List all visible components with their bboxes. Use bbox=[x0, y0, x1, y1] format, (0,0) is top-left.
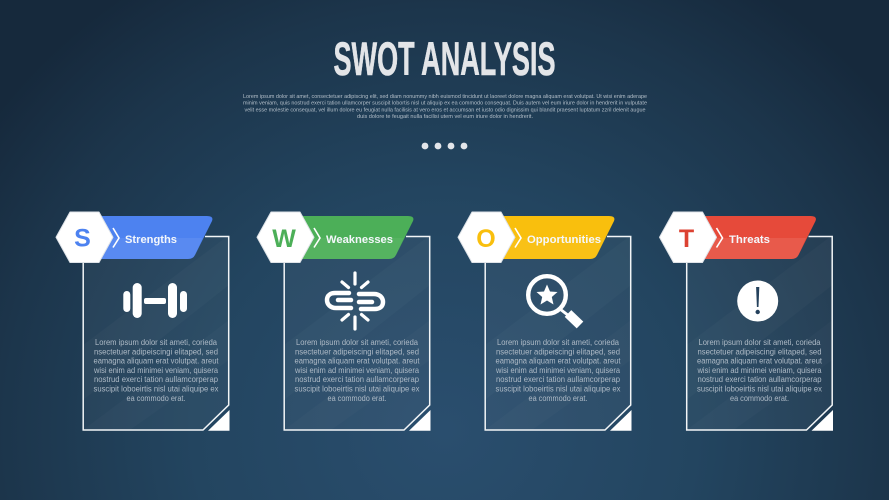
intro text block: duis dolore te feugait nulla facilisi utem vel eum iriure dolor in hendrerit. bbox=[357, 114, 533, 120]
text block: wisi enim ad minimei veniam, quisera bbox=[495, 366, 621, 375]
text block: eamagna aliquam erat volutpat. areut bbox=[496, 357, 621, 366]
text block bbox=[495, 338, 621, 403]
text block: suscipit loboeirtis nisl utai aliquipe ex bbox=[94, 384, 218, 394]
panel body bbox=[485, 235, 631, 430]
text block: ea commodo erat. bbox=[730, 394, 789, 403]
text block: eamagna aliquam erat volutpat. areut bbox=[697, 357, 823, 366]
corner triangle bbox=[610, 410, 632, 431]
panel outline bbox=[83, 236, 229, 430]
panel outline bbox=[284, 236, 430, 430]
intro text block: minim veniam, quis nostrud exerci tation ullamcorper suscipit lobortis nisl ut aliquip ex ea commodo consequat. Duis autem vel eum iriure dolor in hendrerit in vulputate bbox=[243, 101, 647, 107]
hexagon badge: O bbox=[476, 225, 496, 253]
banner bbox=[502, 216, 614, 259]
icon: alert circle bbox=[737, 280, 778, 322]
text block: nostrud exerci tation aullamcorperap bbox=[295, 375, 420, 384]
text block bbox=[93, 338, 219, 403]
text block: Lorem ipsum dolor sit ameti, corieda bbox=[698, 338, 821, 347]
text block: nsectetuer adipeiscingi elitaped, sed bbox=[295, 347, 419, 356]
chevron bbox=[314, 228, 320, 248]
corner triangle bbox=[409, 410, 430, 431]
text block: suscipit loboeirtis nisl utai aliquipe ex bbox=[496, 384, 620, 394]
panel body bbox=[83, 235, 229, 430]
hexagon badge: T bbox=[679, 225, 694, 253]
text block: wisi enim ad minimei veniam, quisera bbox=[697, 366, 822, 375]
chevron bbox=[113, 228, 119, 248]
text block: suscipit loboeirtis nisl utai aliquipe ex bbox=[697, 384, 822, 394]
panel: strengths bbox=[56, 212, 230, 431]
text block bbox=[294, 338, 420, 403]
heading: Threats: Threats bbox=[729, 234, 770, 246]
panel outline bbox=[485, 236, 631, 430]
text block: Lorem ipsum dolor sit ameti, corieda bbox=[497, 338, 620, 347]
text block: nsectetuer adipeiscingi elitaped, sed bbox=[698, 347, 822, 356]
panel: threats bbox=[660, 212, 833, 431]
banner bbox=[301, 216, 413, 259]
banner bbox=[100, 216, 212, 259]
panel body bbox=[284, 235, 430, 430]
text block: eamagna aliquam erat volutpat. areut bbox=[94, 357, 219, 366]
text block: suscipit loboeirtis nisl utai aliquipe ex bbox=[294, 384, 420, 394]
icon: magnifier with star bbox=[528, 276, 580, 325]
text block bbox=[697, 338, 823, 403]
heading: Opportunities: Opportunities bbox=[527, 234, 601, 246]
heading: Weaknesses: Weaknesses bbox=[326, 234, 393, 246]
icon: broken chain bbox=[327, 273, 383, 329]
text block: ea commodo erat. bbox=[126, 394, 186, 403]
text block: wisi enim ad minimei veniam, quisera bbox=[294, 366, 420, 375]
panel: opportunities bbox=[458, 212, 632, 431]
panel outline bbox=[687, 236, 832, 430]
banner bbox=[704, 216, 816, 259]
panel body bbox=[686, 235, 832, 430]
icon: dumbbell bbox=[123, 283, 187, 318]
intro text block: Lorem ipsum dolor sit amet, consectetuer adipiscing elit, sed diam nonummy nibh euismod tincidunt ut laoreet dolore magna aliquam erat volutpat. Ut wisi enim aderape bbox=[243, 94, 647, 100]
text block: ea commodo erat. bbox=[528, 394, 588, 403]
text block: nostrud exerci tation aullamcorperap bbox=[698, 375, 822, 384]
text block: nostrud exerci tation aullamcorperap bbox=[496, 375, 621, 384]
title: SWOT ANALYSIS bbox=[334, 32, 556, 85]
text block: nsectetuer adipeiscingi elitaped, sed bbox=[94, 347, 218, 356]
pagination dots bbox=[422, 143, 467, 149]
text block: eamagna aliquam erat volutpat. areut bbox=[294, 357, 420, 366]
intro text block: velit esse molestie consequat, vel illum dolore eu feugiat nulla facilisis at vero eros et accumsan et iusto odio dignissim qui blandit praesent luptatum zzril delenit augue bbox=[244, 107, 646, 113]
text block: ea commodo erat. bbox=[328, 394, 386, 403]
text block: nostrud exerci tation aullamcorperap bbox=[94, 375, 219, 384]
text block: nsectetuer adipeiscingi elitaped, sed bbox=[496, 347, 620, 356]
hexagon badge: S bbox=[74, 225, 91, 253]
heading: Strengths: Strengths bbox=[125, 234, 177, 246]
hexagon badge bbox=[257, 212, 314, 262]
corner triangle bbox=[208, 410, 230, 431]
text block: Lorem ipsum dolor sit ameti, corieda bbox=[296, 338, 419, 347]
hexagon badge bbox=[458, 212, 515, 262]
intro text block bbox=[243, 94, 647, 120]
chevron bbox=[716, 228, 722, 248]
hexagon badge: W bbox=[272, 225, 296, 253]
text block: Lorem ipsum dolor sit ameti, corieda bbox=[95, 338, 218, 347]
panel: weaknesses bbox=[257, 212, 430, 431]
hexagon badge bbox=[56, 212, 113, 262]
corner triangle bbox=[812, 410, 833, 431]
text block: wisi enim ad minimei veniam, quisera bbox=[93, 366, 219, 375]
hexagon badge bbox=[660, 212, 716, 262]
chevron bbox=[515, 228, 521, 248]
